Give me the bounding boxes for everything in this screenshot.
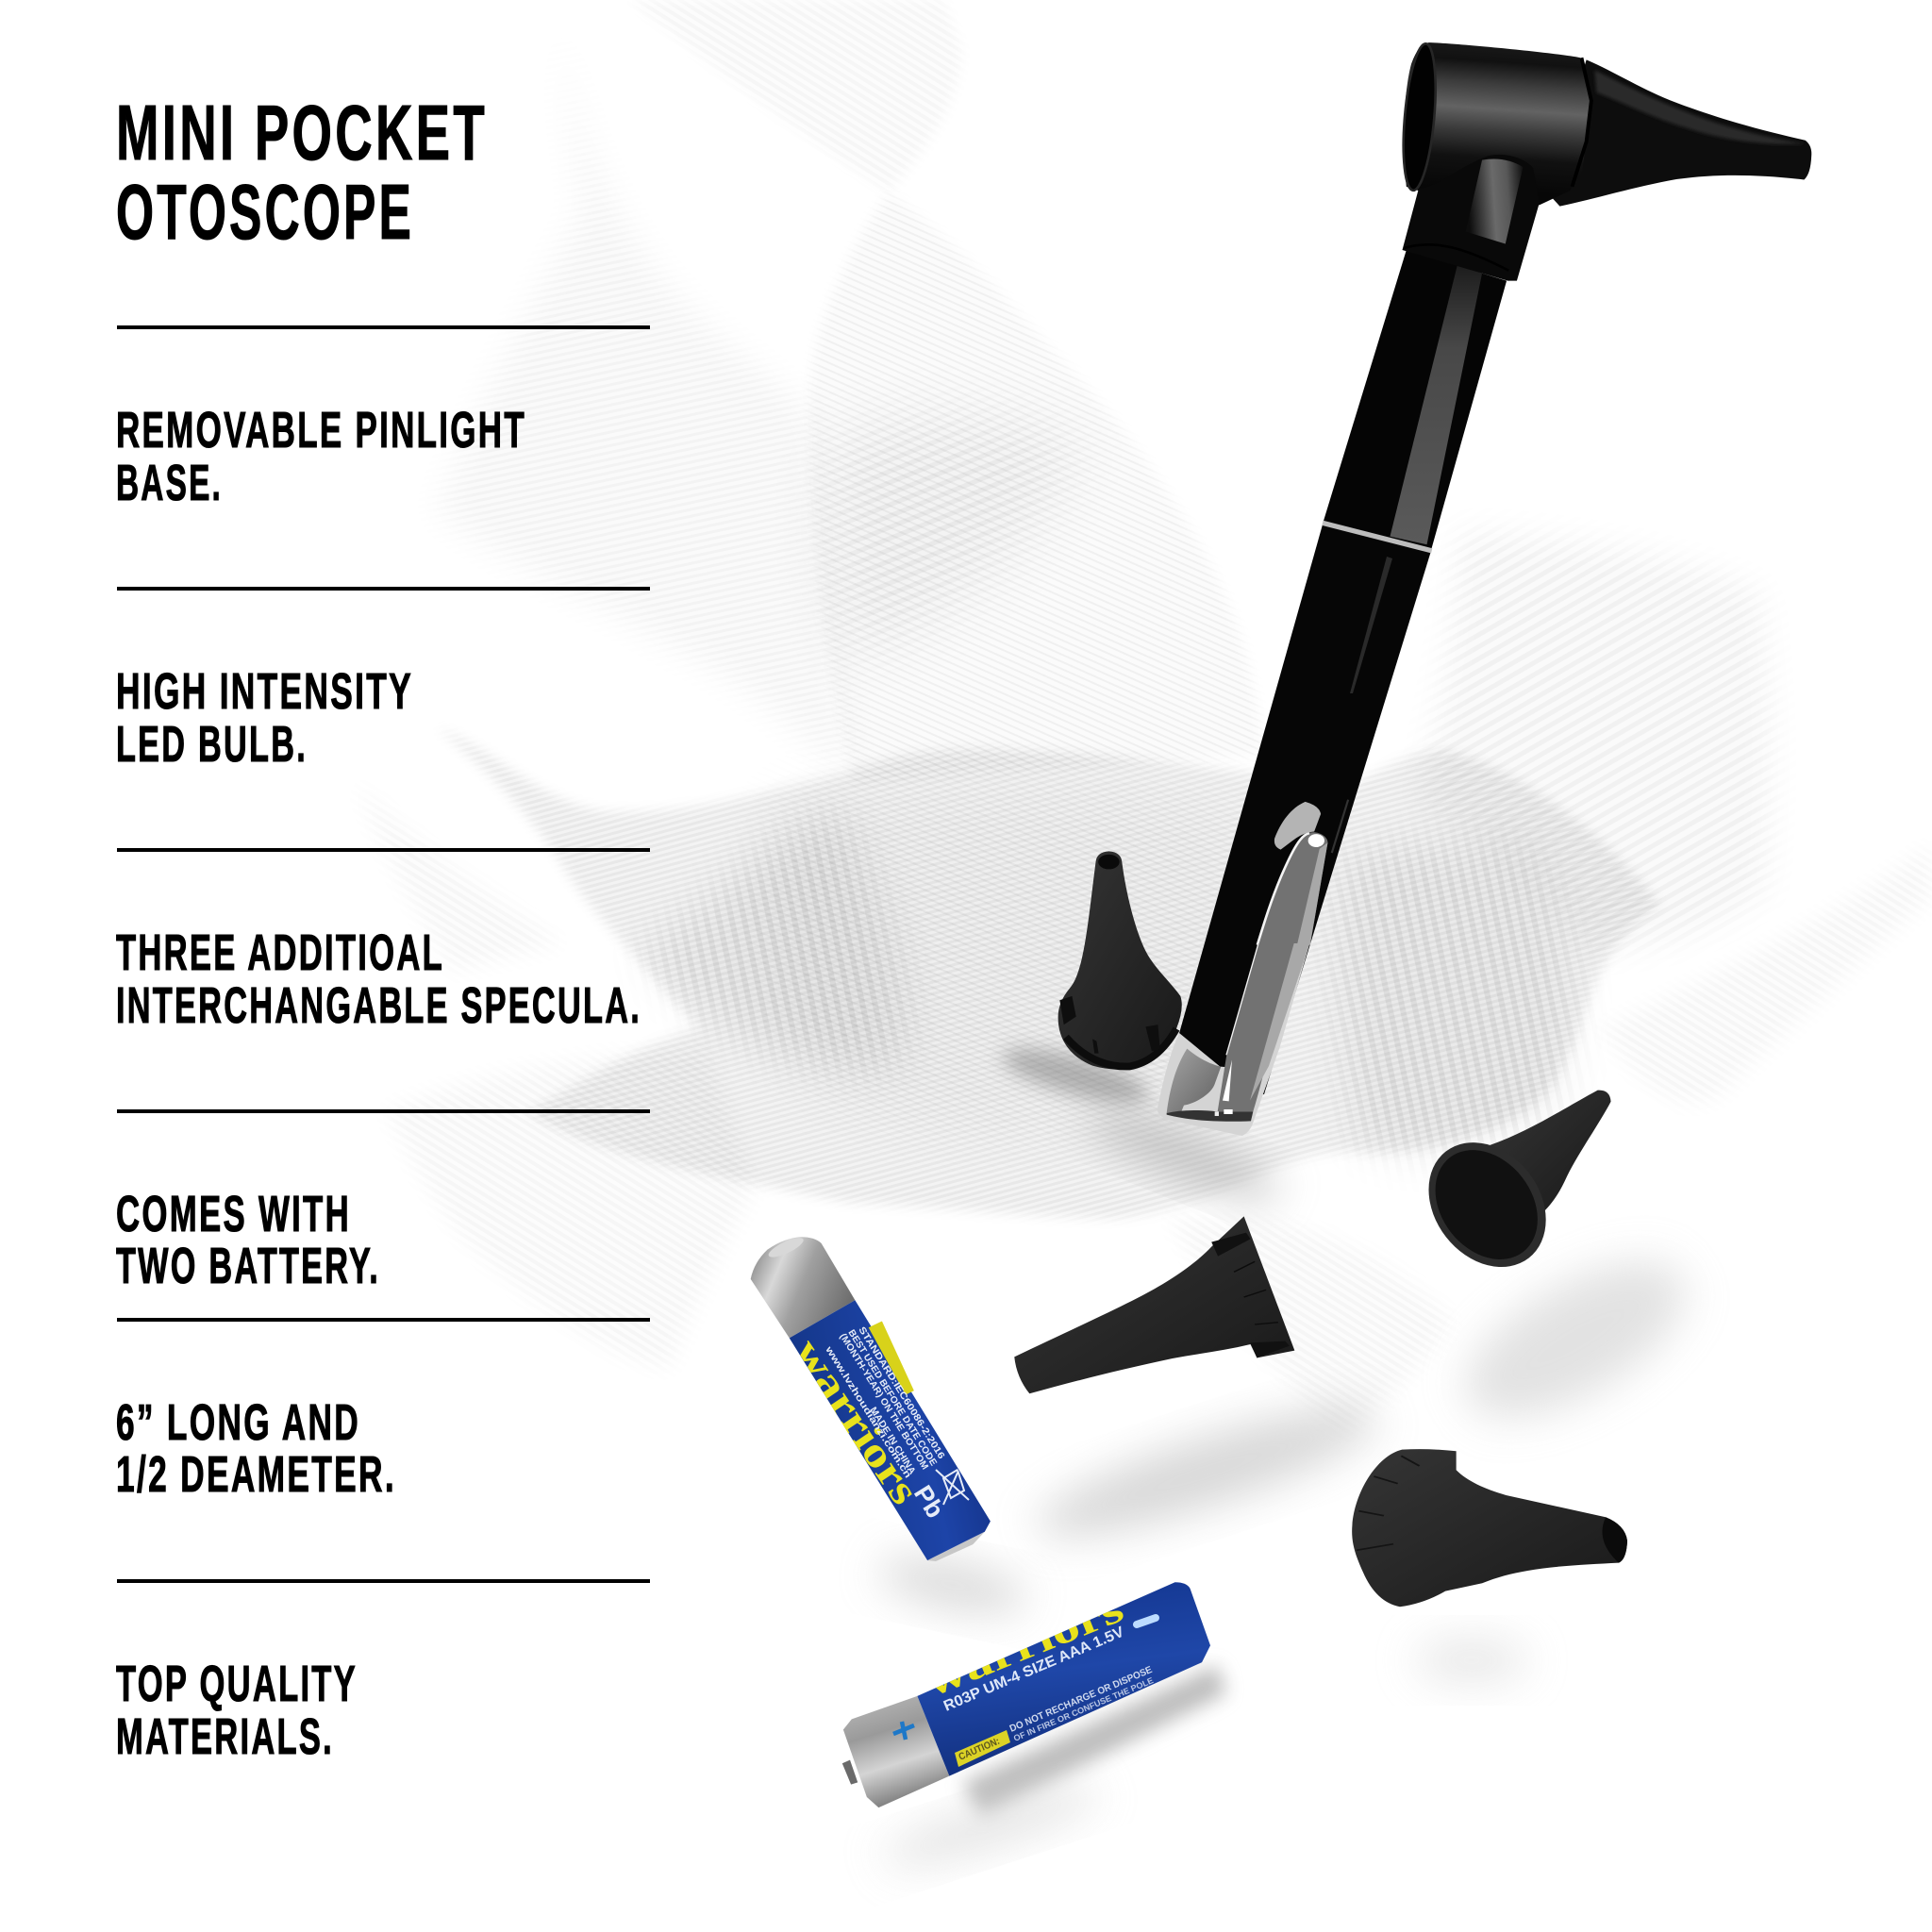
feature: 6 inch long and 1/2 diameter: 1/2 DEAMETER. [116,1446,396,1503]
barrel right edge glint [1332,800,1348,853]
battery label text: (MONTH-YEAR) ON THE BOTTOM [837,1332,930,1472]
speculum: lying horizontal [1014,1216,1294,1393]
feature: comes with two battery: COMES WITH [116,1186,351,1242]
chrome white streak [1223,1059,1232,1101]
feature: removable pinlight base [116,402,526,511]
battery: upright [751,1234,991,1561]
chrome pocket clip [1257,832,1327,945]
feature: removable pinlight base: REMOVABLE PINLIGHT [116,402,526,458]
reflection above clip [1274,802,1321,850]
battery label text [800,1326,970,1517]
feature: high intensity LED bulb: LED BULB. [116,716,308,773]
soft shadows under objects [874,1038,1709,1880]
cone upper sheen [1594,70,1806,144]
title: OTOSCOPE [116,168,414,256]
cone tip [1545,59,1811,207]
collar edge [1405,244,1508,271]
feature: three additional specula [116,924,641,1034]
battery label text [936,1607,1154,1767]
blue jacket [917,1582,1210,1776]
battery label text: MADE IN CHINA [867,1406,917,1476]
clip right edge sheen [1297,842,1327,945]
battery: lying [842,1582,1210,1807]
divider rules [117,325,650,1583]
speculum: upright beside pen [1058,851,1182,1069]
feature: comes with two battery [116,1186,380,1294]
battery label text: warriors [785,1330,928,1512]
feature: top quality materials: MATERIALS. [116,1708,334,1765]
blue jacket [790,1300,991,1560]
speculum: bottom right [1352,1449,1627,1607]
chrome dark base band [1167,1110,1253,1122]
otoscope: pen barrel and head [1158,42,1811,1136]
clip left edge [1257,833,1309,945]
battery label text: Pb [908,1480,950,1523]
gap between head and cone [1572,58,1591,187]
clip lower section [1218,943,1295,1111]
stem collar [1402,155,1540,281]
feature: top quality materials [116,1656,358,1765]
battery silver end [843,1696,949,1807]
battery label text: warriors [920,1587,1130,1706]
barrel upper section [1323,250,1507,551]
battery label text: STANDARD:IEC60086-2:2016 [856,1325,946,1461]
feature: removable pinlight base: BASE. [116,455,223,511]
chrome tip inner reflection [1167,1049,1221,1117]
feature: three additional specula: INTERCHANGABLE SPECULA. [116,977,641,1034]
background: faint moire wave pattern [404,8,1917,1392]
minus sign [1137,1618,1156,1624]
feature: top quality materials: TOP QUALITY [116,1656,358,1712]
stem highlight [1466,158,1523,244]
battery label text: DO NOT RECHARGE OR DISPOSE [1008,1664,1154,1735]
feature: high intensity LED bulb [116,663,413,773]
feature: three additional specula: THREE ADDITIOAL [116,924,444,981]
speculum: tilted showing open end [1405,1091,1611,1291]
battery label text: BEST USED BEFORE DATE CODE [845,1328,939,1468]
feature: high intensity LED bulb: HIGH INTENSITY [116,663,413,720]
feature: 6 inch long and 1/2 diameter [116,1394,396,1503]
chrome tip [1158,943,1309,1136]
metal ring [1323,523,1432,551]
battery body silver end [751,1234,991,1561]
title [116,89,488,256]
lower barrel highlight [1350,557,1392,693]
barrel highlight stripe [1390,264,1482,544]
battery label text: www.lvzhoudianzi.com.cn [823,1344,913,1480]
yellow edge strip [869,1322,914,1395]
clip left edge [1226,943,1258,1055]
chrome small glints [1224,1109,1233,1114]
head opening [1398,42,1441,192]
battery label text: CAUTION: [957,1736,1002,1763]
head cylinder [1404,42,1591,205]
feature: comes with two battery: TWO BATTERY. [116,1238,380,1294]
feature: 6 inch long and 1/2 diameter: 6” LONG AND [116,1394,360,1451]
barrel lower section [1158,525,1431,1110]
plus sign [893,1722,914,1740]
title: MINI POCKET [116,89,488,176]
battery label text: OF IN FIRE OR CONFUSE THE POLE [1012,1675,1155,1743]
battery label text: R03P UM-4 SIZE AAA 1.5V [941,1624,1127,1715]
left panel: feature list [116,89,650,1765]
clip bright spot [1308,834,1324,847]
